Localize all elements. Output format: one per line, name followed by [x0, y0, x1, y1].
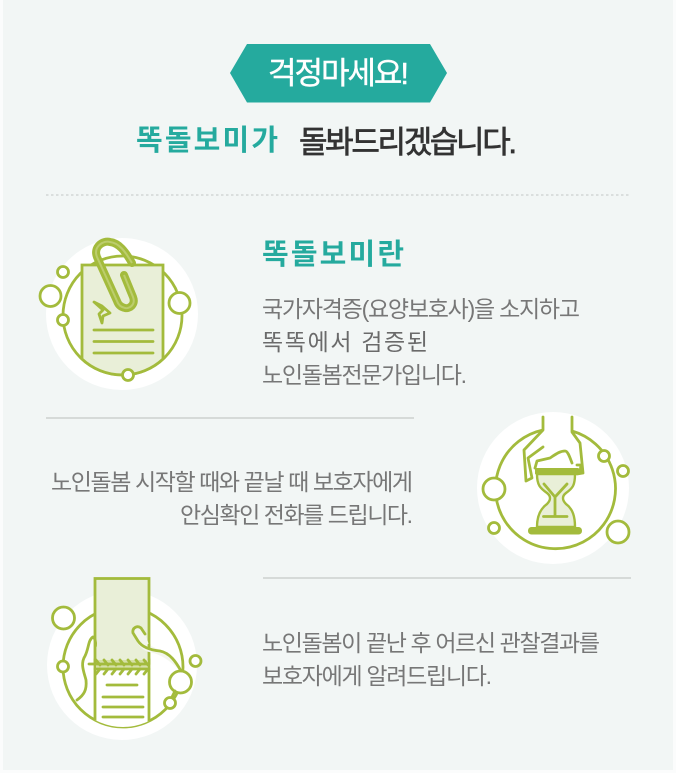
badge: 걱정마세요: 걱정마세요!	[268, 56, 409, 91]
text: description: 똑똑에서 검증된	[262, 329, 428, 355]
badge: 걱정마세요	[230, 44, 447, 102]
icon: hourglass with hand	[477, 412, 629, 564]
text: description	[262, 296, 580, 388]
text: result report: 노인돌봄이 끝난 후 어르신 관찰결과를	[262, 630, 600, 656]
heading: 돌봐드리겠습니다.	[299, 125, 517, 160]
icon: paper with paperclip	[40, 238, 198, 390]
text: phone call	[51, 469, 413, 528]
heading	[136, 124, 517, 160]
heading: 똑돌보미란: 똑돌보미란	[262, 238, 404, 271]
text: phone call: 안심확인 전화를 드립니다.	[180, 502, 413, 528]
text: result report: 보호자에게 알려드립니다.	[262, 663, 492, 689]
heading: 똑돌보미가	[136, 124, 278, 157]
text: result report	[262, 630, 600, 689]
text: phone call: 노인돌봄 시작할 때와 끝날 때 보호자에게	[51, 469, 413, 495]
text: description: 노인돌봄전문가입니다.	[262, 362, 467, 388]
text: description: 국가자격증(요양보호사)을 소지하고	[262, 296, 580, 322]
icon: tearing a document	[47, 578, 201, 740]
